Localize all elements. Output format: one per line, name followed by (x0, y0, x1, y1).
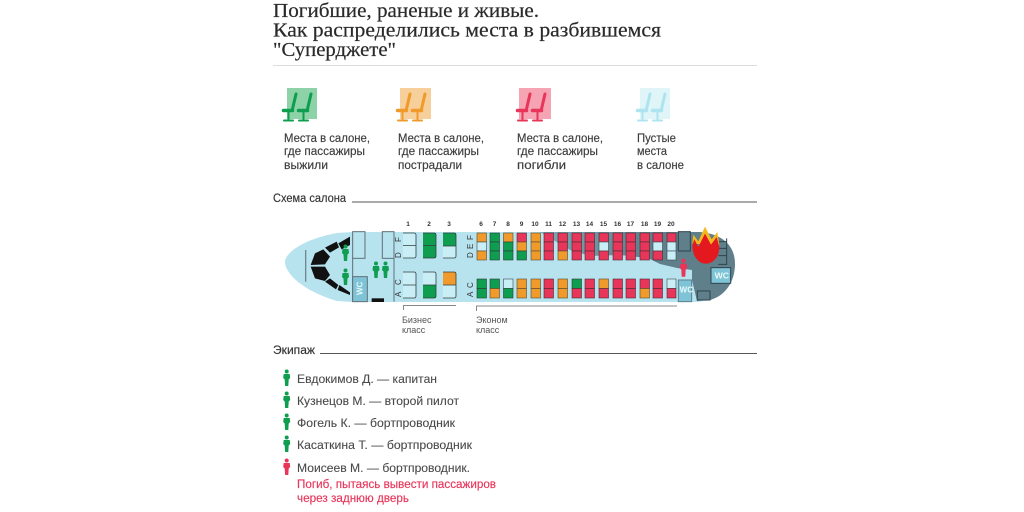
seat letters: F (466, 235, 475, 240)
row numbers: 20 (667, 221, 675, 228)
label: economy class: класс (476, 325, 500, 335)
heading: crew: Экипаж (273, 345, 315, 357)
row numbers: 1 (406, 221, 410, 228)
row numbers: 2 (427, 221, 431, 228)
row numbers: 14 (586, 221, 593, 228)
seat letters: D (394, 252, 403, 258)
heading: cabin layout: Схема салона (273, 193, 347, 205)
legend: dead seats (517, 88, 603, 172)
seat letters: A (466, 291, 475, 297)
economy class seats (477, 233, 676, 298)
row numbers: 18 (641, 221, 648, 228)
legend: injured seats: где пассажиры (398, 146, 479, 158)
seat letters: C (394, 279, 403, 285)
row numbers: 6 (479, 221, 483, 228)
row numbers: 15 (600, 221, 607, 228)
legend: empty seats: в салоне (637, 160, 684, 172)
bracket: business class (404, 306, 456, 310)
title: Погибшие, раненые и живые. (273, 0, 539, 22)
rear galley and toilets: WC (715, 270, 730, 280)
cockpit seats and windshield: WC (356, 281, 365, 295)
crew member: co-pilot: Кузнецов М. — второй пилот (297, 394, 460, 408)
rear galley and toilets: WC (680, 286, 693, 295)
legend: dead seats: где пассажиры (517, 146, 598, 158)
legend: injured seats: пострадали (398, 160, 462, 172)
note: Moiseev's death: через заднюю дверь (297, 493, 409, 505)
legend: dead seats: Места в салоне, (517, 133, 603, 145)
crew positions: front (342, 244, 389, 285)
row numbers: 9 (520, 221, 524, 228)
business class seats (403, 233, 456, 298)
label: business class: Бизнес (402, 315, 432, 325)
title: "Суперджете" (273, 39, 396, 61)
row numbers: 7 (493, 221, 497, 228)
legend: injured seats (398, 88, 484, 172)
aircraft cabin diagram (285, 221, 735, 335)
row numbers: 19 (654, 221, 661, 228)
seat letters (394, 235, 475, 297)
row numbers: 10 (531, 221, 539, 228)
seat letters: A (394, 291, 403, 297)
label: economy class: Эконом (476, 315, 508, 325)
title (273, 0, 661, 61)
seat letters: E (466, 244, 475, 249)
crew list (283, 370, 496, 505)
seat letters: F (394, 237, 403, 242)
crew member: Moiseev: Моисеев М. — бортпроводник. (297, 461, 470, 475)
row numbers: 17 (627, 221, 634, 228)
seat letters: C (466, 282, 475, 288)
row numbers: 13 (573, 221, 580, 228)
legend: survived seats: выжили (284, 160, 328, 172)
row numbers: 12 (559, 221, 566, 228)
legend: empty seats: места (637, 146, 668, 158)
legend: dead seats: погибли (517, 160, 566, 172)
icon: fire (692, 227, 719, 264)
row numbers: 16 (614, 221, 621, 228)
label: business class (402, 315, 432, 335)
label: economy class (476, 315, 508, 335)
legend: survived seats: где пассажиры (284, 146, 365, 158)
fuselage (285, 232, 712, 302)
rear galley and toilets (678, 232, 731, 302)
bracket: economy class (476, 306, 677, 311)
row numbers (406, 221, 675, 228)
front galley boxes (353, 232, 394, 302)
crew member: Fogel: Фогель К. — бортпроводник (297, 416, 456, 430)
legend: empty seats: Пустые (637, 133, 676, 145)
note: Moiseev's death (297, 479, 496, 505)
row numbers: 11 (545, 221, 552, 228)
crew member: captain: Евдокимов Д. — капитан (297, 372, 437, 386)
row numbers: 3 (447, 221, 451, 228)
cockpit seats and windshield (306, 232, 394, 302)
label: business class: класс (402, 325, 426, 335)
crew position: flight attendant who died (680, 259, 687, 277)
legend: empty seats (637, 88, 684, 172)
tail: damaged section (540, 232, 735, 301)
title: Как распределились места в разбившемся (273, 20, 661, 42)
row numbers: 8 (506, 221, 510, 228)
legend: survived seats (284, 88, 370, 172)
note: Moiseev's death: Погиб, пытаясь вывести пассажиров (297, 479, 496, 491)
legend: injured seats: Места в салоне, (398, 133, 484, 145)
seat letters: D (466, 252, 475, 258)
legend: survived seats: Места в салоне, (284, 133, 370, 145)
crew member: Kasatkina: Касаткина Т. — бортпроводник (297, 438, 473, 452)
